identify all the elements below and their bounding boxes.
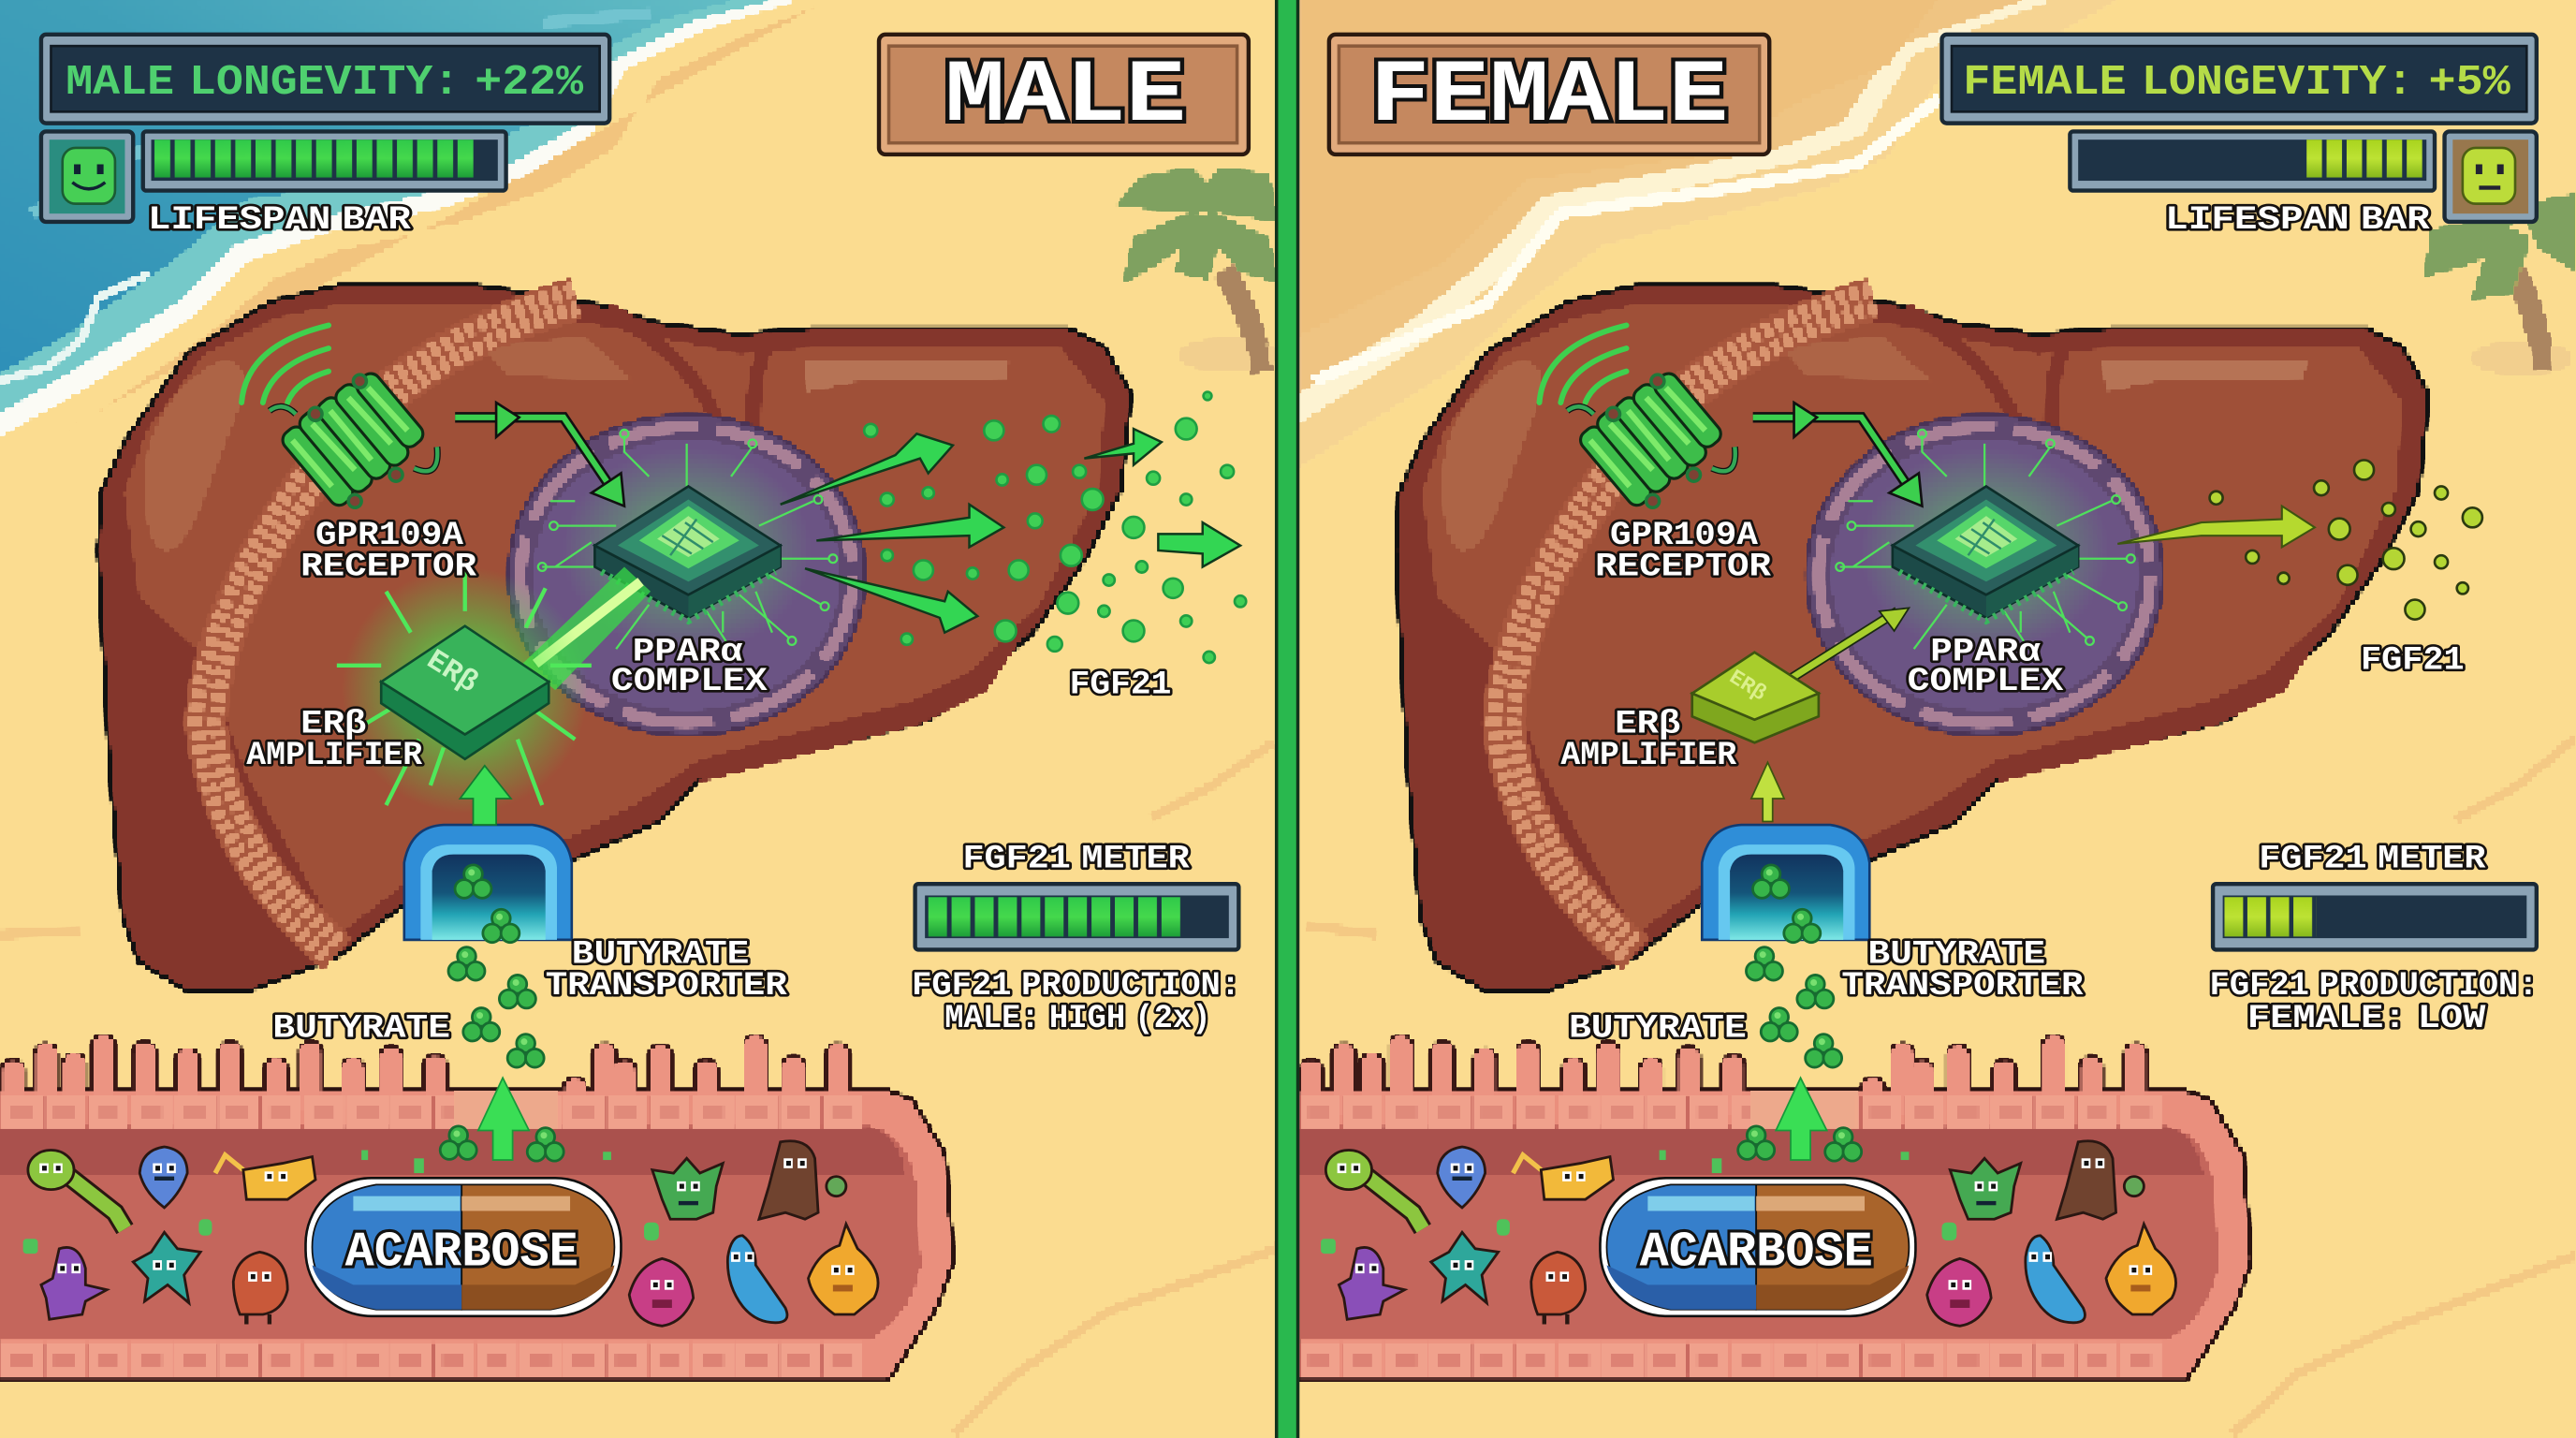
gut microbes <box>1321 1141 2176 1326</box>
ER beta amplifier chip <box>1692 653 1819 742</box>
labels: male: PPARα <box>633 634 743 671</box>
labels: male: AMPLIFIER <box>246 737 423 774</box>
arrow: ER beta to PPAR <box>1791 608 1909 679</box>
PPAR chip <box>1836 430 2135 649</box>
liver <box>98 286 1131 990</box>
intestine with villi <box>0 1047 953 1380</box>
labels: female: FGF21 PRODUCTION: <box>2210 967 2539 1005</box>
butyrate transporter <box>404 825 572 943</box>
butyrate molecules <box>440 947 564 1161</box>
labels: male: COMPLEX <box>611 663 768 700</box>
intestine with villi <box>1298 1047 2250 1380</box>
gut microbes <box>23 1141 878 1326</box>
labels: male <box>148 201 1240 1047</box>
panel: male side <box>0 0 1281 1438</box>
arrow: butyrate into gut wall <box>478 1078 529 1160</box>
acarbose capsule <box>305 1178 621 1316</box>
arrow: transporter to ER beta <box>1751 762 1784 822</box>
ER beta amplifier chip: ERβ <box>1725 665 1771 706</box>
arrow: transporter to ER beta <box>460 766 511 825</box>
labels: female: BUTYRATE <box>1569 1009 1747 1047</box>
palm tree <box>1117 168 1278 372</box>
labels: male: FGF21 PRODUCTION: <box>912 967 1240 1005</box>
labels: female <box>1560 201 2539 1047</box>
labels: male: BUTYRATE <box>272 1009 450 1047</box>
labels: female: FGF21 <box>2361 641 2465 679</box>
labels: female: BUTYRATE <box>1868 935 2045 973</box>
PPAR chip <box>538 430 837 649</box>
male longevity HUD: MALE LONGEVITY: +22% <box>66 58 584 107</box>
beach shoreline with wet sand <box>1299 0 2576 1438</box>
arrow: butyrate into gut wall <box>1776 1078 1827 1160</box>
labels: male: FGF21 <box>1070 667 1171 704</box>
signal arrow: receptor to PPAR <box>1753 403 1922 506</box>
GPR109A receptor <box>242 325 437 509</box>
male sign <box>879 35 1249 154</box>
ER beta amplifier chip <box>337 566 592 814</box>
labels: female: FGF21 METER <box>2259 841 2486 878</box>
liver <box>1397 286 2428 990</box>
acarbose capsule <box>1600 1178 1915 1316</box>
PPAR alpha complex disc <box>1808 416 2162 734</box>
panel: female side <box>1298 0 2576 1438</box>
palm tree <box>2424 194 2576 374</box>
acarbose capsule: ACARBOSE <box>345 1224 578 1280</box>
labels: female: GPR109A <box>1610 517 1759 554</box>
labels: female: RECEPTOR <box>1595 548 1772 585</box>
butyrate transporter <box>1702 825 1869 943</box>
signal arrow: receptor to PPAR <box>455 403 624 506</box>
lifespan face icon <box>2445 131 2537 222</box>
labels: female: LIFESPAN BAR <box>2165 201 2431 239</box>
female longevity HUD: FEMALE LONGEVITY: +5% <box>1963 58 2510 107</box>
FGF21 particles <box>864 392 1246 663</box>
ER beta amplifier chip: ERβ <box>420 644 483 700</box>
FGF21 output arrow <box>2117 506 2315 547</box>
lifespan face icon <box>41 131 133 222</box>
PPAR alpha complex disc <box>509 416 864 734</box>
labels: female: PPARα <box>1930 634 2042 671</box>
GPR109A receptor <box>1540 325 1735 509</box>
lifespan bar <box>143 131 506 191</box>
labels: female: TRANSPORTER <box>1841 967 2084 1005</box>
male longevity HUD <box>41 35 609 124</box>
labels: male: MALE: HIGH (2x) <box>944 1000 1211 1037</box>
butyrate molecules <box>1738 947 1862 1161</box>
female sign: FEMALE <box>1370 47 1728 147</box>
FGF21 particles <box>2210 460 2482 620</box>
labels: male: BUTYRATE <box>572 935 749 973</box>
lifespan bar <box>2070 131 2435 191</box>
female sign <box>1329 35 1769 154</box>
beam: ER beta to PPAR <box>522 566 651 690</box>
labels: male: ERβ <box>300 706 366 743</box>
labels: female: ERβ <box>1615 706 1680 743</box>
acarbose capsule: ACARBOSE <box>1640 1224 1873 1280</box>
labels: male: FGF21 METER <box>963 841 1191 878</box>
labels: female: FEMALE: LOW <box>2247 1000 2486 1037</box>
labels: male: TRANSPORTER <box>546 967 788 1005</box>
FGF21 output arrows <box>781 429 1240 633</box>
beach shoreline with ocean <box>0 0 1281 1438</box>
FGF21 meter <box>2213 884 2537 949</box>
labels: female: COMPLEX <box>1908 663 2064 700</box>
labels: male: GPR109A <box>315 517 464 554</box>
FGF21 meter <box>915 884 1238 949</box>
labels: male: LIFESPAN BAR <box>148 201 412 239</box>
male sign: MALE <box>944 47 1186 147</box>
female longevity HUD <box>1942 35 2537 124</box>
center divider <box>1275 0 1299 1438</box>
labels: male: RECEPTOR <box>300 548 477 585</box>
labels: female: AMPLIFIER <box>1560 737 1737 774</box>
